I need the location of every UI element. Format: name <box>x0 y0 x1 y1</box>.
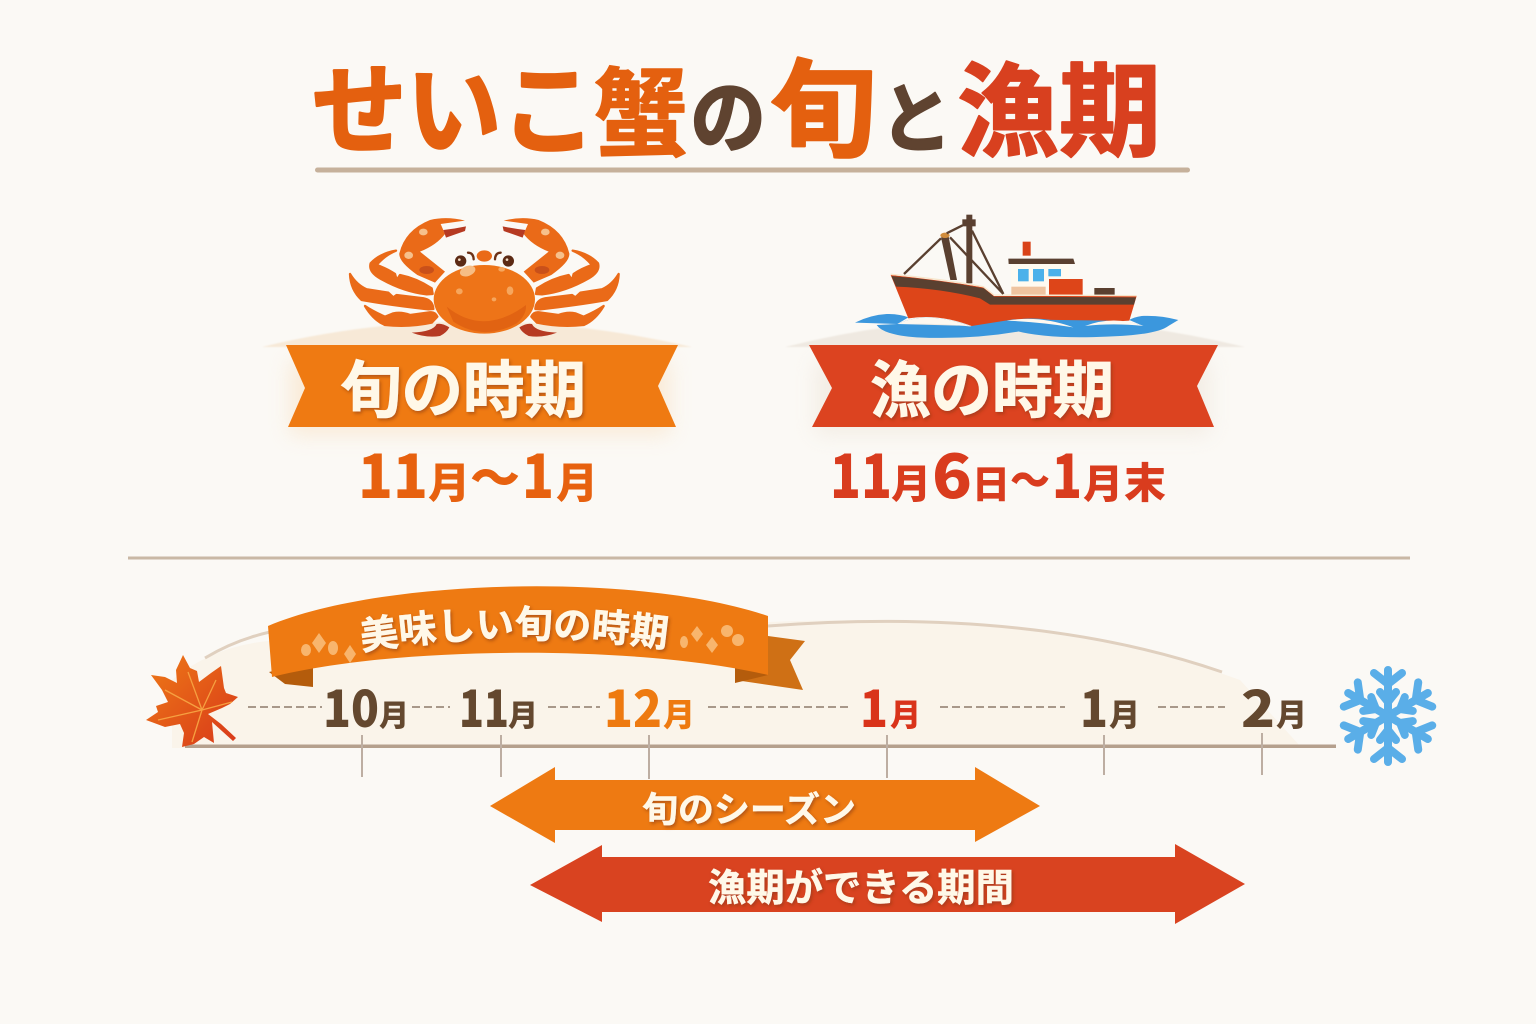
waves <box>855 314 1178 338</box>
month labels: 月 <box>1276 690 1307 735</box>
panel: peak season <box>262 218 692 516</box>
month labels <box>323 670 1307 742</box>
fishing season dates: 日 <box>972 454 1010 509</box>
timeline axis <box>185 744 1336 748</box>
month labels: 月 <box>890 690 921 735</box>
month labels: 月 <box>1109 690 1140 735</box>
ribbon label: 旬の時期 <box>340 340 586 430</box>
sparkles <box>301 625 744 663</box>
title: と <box>880 58 952 168</box>
arrow label: 旬のシーズン <box>642 782 856 833</box>
section divider <box>128 556 1410 560</box>
icon: maple leaf <box>146 655 238 747</box>
month labels: 11 <box>459 670 509 742</box>
month labels: 2 <box>1241 670 1275 742</box>
timeline <box>172 620 1336 779</box>
arrow label: 漁期ができる期間 <box>708 857 1014 912</box>
panel: fishing season <box>785 215 1245 516</box>
month labels: 12 <box>604 670 662 742</box>
tick marks <box>362 733 1262 779</box>
peak season dates: 11 <box>358 429 428 516</box>
month dashes <box>248 706 1225 708</box>
icon: crab <box>350 218 619 337</box>
peak season dates: 1 <box>522 429 554 516</box>
title underline <box>315 168 1190 172</box>
month labels: 月 <box>663 690 695 736</box>
banner: delicious season <box>268 586 805 690</box>
fishing season dates: 末 <box>1124 450 1166 511</box>
title: せいこ <box>312 30 596 175</box>
fishing season dates: 〜 <box>1010 445 1050 509</box>
arrow: peak season <box>490 767 1040 843</box>
fishing season dates: 6 <box>932 429 972 516</box>
month labels: 月 <box>508 691 538 735</box>
title: 漁期 <box>957 31 1161 178</box>
peak season dates: 〜 <box>470 439 520 511</box>
shore mound behind boat <box>785 318 1245 347</box>
month labels: 10 <box>323 670 379 742</box>
ribbon: fishing season <box>809 345 1218 427</box>
title: の <box>690 54 766 170</box>
peak season dates <box>358 429 598 516</box>
peak season dates: 月 <box>556 450 598 511</box>
fishing season dates: 1 <box>1052 429 1082 516</box>
month labels: 1 <box>860 670 888 742</box>
arrow: fishing period <box>530 844 1245 924</box>
fishing season dates: 月 <box>1083 452 1123 510</box>
title: 旬 <box>770 25 876 179</box>
peak season dates: 月 <box>428 450 470 511</box>
ribbon glow <box>815 360 1210 435</box>
fishing season dates: 月 <box>891 452 931 510</box>
sand mound behind crab <box>262 322 692 347</box>
title: 蟹 <box>594 37 688 176</box>
month labels: 月 <box>379 691 409 735</box>
fishing season dates: 11 <box>830 429 892 516</box>
ribbon: peak season <box>286 345 678 427</box>
timeline hill <box>172 620 1300 748</box>
banner label <box>362 637 672 650</box>
icon: snowflake <box>1341 670 1435 762</box>
icon: fishing boat <box>855 215 1178 338</box>
banner: delicious season: 美味しい旬の時期 <box>362 604 672 656</box>
title <box>312 25 1161 179</box>
fishing season dates <box>830 429 1166 516</box>
ribbon label: 漁の時期 <box>870 340 1114 430</box>
month labels: 1 <box>1080 670 1108 742</box>
ribbon glow <box>290 360 670 435</box>
